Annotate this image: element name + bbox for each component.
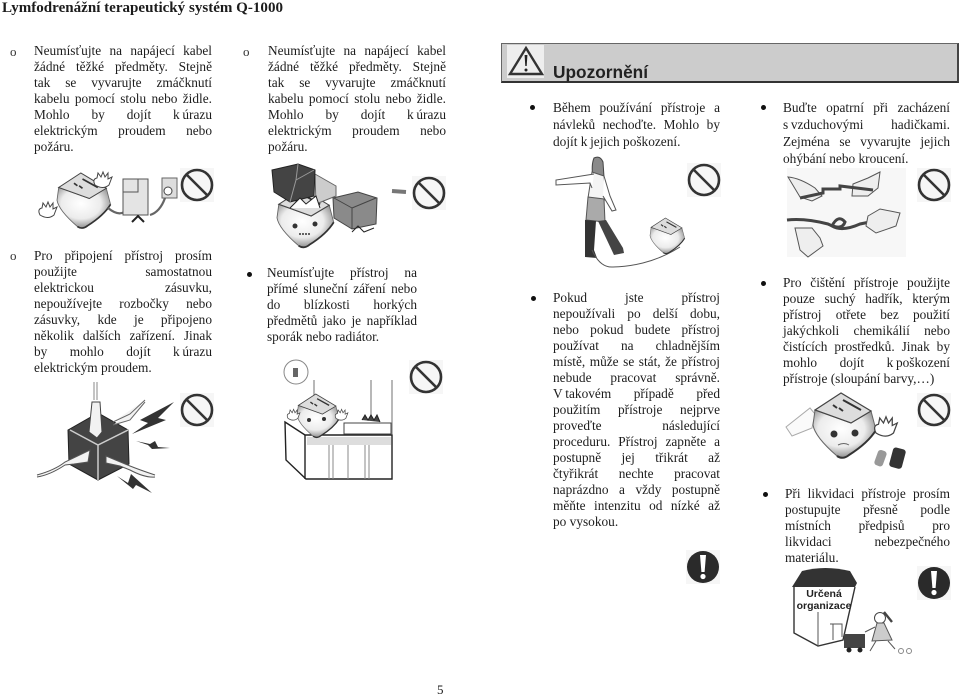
text block: long storage note: používat na chladnějším [553,338,720,353]
bullet: o [10,248,16,263]
text block: cleaning note: jakýchkoli chemikálií nebo [783,323,950,338]
text block: long storage note: proveďte následující [553,418,720,433]
icon: exclamation [917,566,951,600]
text block: sun and heat warning: předmětů jako je například [267,313,417,328]
text block: hose warning: ohýbání nebo kroucení. [783,151,908,166]
text block: socket warning: Pro připojení přístroj prosím [34,248,212,263]
text block: long storage note: V takovém případě před [553,386,720,401]
text block: walking warning: dojít k jejich poškození. [553,134,680,149]
icon: warning triangle [507,45,544,78]
text block: socket warning: nepoužívejte rozbočky nebo [34,296,212,311]
icon: prohibition [412,176,446,210]
icon: prohibition [917,393,951,427]
icon: lightning bolts [117,402,174,493]
illustration: overloaded socket cube [37,382,155,480]
text block: cleaning note: Pro čištění přístroje použijte [783,275,950,290]
icon: prohibition [917,168,951,202]
illustration: disposal organization building [792,568,912,654]
text block: cord warning 1: tak se vyvarujte zmáčknutí [34,75,212,90]
bullet [530,105,535,110]
text block: cord warning 1: elektrickým proudem nebo [34,123,212,138]
icon: exclamation [686,550,720,584]
bullet [247,272,252,277]
text block: cord warning 2: Mohlo by dojít k úrazu [268,107,446,122]
text block: cord warning 2: žádné těžké předměty. Stejně [268,59,446,74]
text block: long storage note: čtyřikrát nechte pracovat [553,466,720,481]
text block: cleaning note: čistících prostředků. Jinak by [783,339,950,354]
illustration: wiping device [786,393,906,469]
text block: sun and heat warning: přímé sluneční záření nebo [267,281,417,296]
icon: prohibition [180,393,214,427]
text block: disposal note: materiálu. [785,550,839,565]
text block: hose warning [783,100,950,166]
text block: disposal note: Při likvidaci přístroje prosím [785,486,950,501]
illustration: disposal organization building: Určená [806,588,842,600]
icon: prohibition [687,163,721,197]
bullet [763,492,768,497]
text block: cord warning 2 [268,43,446,154]
text block: socket warning: by mohlo dojít k úrazu [34,344,212,359]
text block: long storage note [553,290,720,529]
text block: long storage note: nepoužívali po delší dobu, [553,306,720,321]
illustration: device under boxes [272,164,406,247]
text block: long storage note: Pokud jste přístroj [553,290,720,305]
text block: hose warning: Buďte opatrní při zacházení [783,100,950,115]
text block: socket warning: několik dalších zařízení. Jinak [34,328,212,343]
text block: long storage note: naprázdno a vždy postupně [553,482,720,497]
icon: prohibition [180,168,214,202]
text block: hose warning: s vzduchovými hadičkami. [783,117,950,132]
text block: cord warning 1: požáru. [34,139,74,154]
text block: cord warning 1 [34,43,212,154]
text block: cord warning 1: Neumísťujte na napájecí kabel [34,43,212,58]
text block: cord warning 2: elektrickým proudem nebo [268,123,446,138]
illustration: walking person [556,157,685,267]
text block: long storage note: po vysokou. [553,514,618,529]
text block: disposal note: likvidaci nebezpečného [785,534,950,549]
illustration: hands bending hose [787,168,906,257]
text block: socket warning: použijte samostatnou [34,264,212,279]
text block: cord warning 1: kabelu pomocí stolu nebo židle. [34,91,212,106]
text block: sun and heat warning: sporák nebo radiátor. [267,329,379,344]
text block: disposal note: místních předpisů pro [785,518,950,533]
text block: sun and heat warning [267,265,417,344]
text block: cleaning note: přístroje (sloupání barvy,…) [783,371,934,386]
text block: sun and heat warning: do blízkosti horkých [267,297,417,312]
bullet: o [10,44,16,59]
title: Lymfodrenážní terapeutický systém Q-1000 [2,0,283,16]
text block: cord warning 2: kabelu pomocí stolu nebo židle. [268,91,446,106]
text block: socket warning: elektrickým proudem. [34,360,152,375]
text block: walking warning: Během používání přístroje a [553,100,720,115]
text block: socket warning [34,248,212,375]
text block: long storage note: proceduru. Přístroj zapněte a [553,434,720,449]
text block: cord warning 1: Mohlo by dojít k úrazu [34,107,212,122]
text block: long storage note: nebude pracovat správně. [553,370,720,385]
icon: prohibition [409,360,443,394]
text block: long storage note: nebo pokud budete přístroj [553,322,720,337]
text block: cleaning note [782,275,950,386]
bullet [761,105,766,110]
text block: long storage note: měňte intenzitu od nízké až [553,498,720,513]
bullet [531,296,536,301]
text block: cleaning note: přístroj otřete bez použití [783,307,950,322]
text block: sun and heat warning: Neumísťujte přístroj na [267,265,417,280]
heading: Upozornění [553,62,648,82]
text block: socket warning: zásuvky, kde je připojeno [34,312,212,327]
text block: hose warning: Zejména se vyvarujte jejich [783,134,950,149]
text block: disposal note [785,486,950,565]
illustration: device on cabinet near sun and heater [284,360,392,479]
text block: cleaning note: pouze suchý hadřík, kterým [783,291,950,306]
text block: cord warning 1: žádné těžké předměty. Stejně [34,59,212,74]
text block: cord warning 2: tak se vyvarujte zmáčknutí [268,75,446,90]
text block: cleaning note: mohlo dojít k poškození [783,355,950,370]
text block: long storage note: použitím přístroje nejprve [553,402,720,417]
panel: warning banner [501,43,959,83]
illustration: disposal organization building: organizace [797,600,852,612]
bullet [761,281,766,286]
bullet: o [243,44,250,59]
text block: cord warning 2: Neumísťujte na napájecí kabel [268,43,446,58]
text block: walking warning: návleků nechoďte. Mohlo by [553,117,720,132]
text block: long storage note: místě, může se stát, že přístroj [553,354,720,369]
text block: disposal note: postupujte přesně podle [785,502,950,517]
text block: walking warning [553,100,720,149]
text block: socket warning: elektrickou zásuvku, [34,280,212,295]
illustration: device with cord under fridge [39,172,177,228]
text block: long storage note: postupně jej třikrát až [553,450,720,465]
text block: cord warning 2: požáru. [268,139,308,154]
